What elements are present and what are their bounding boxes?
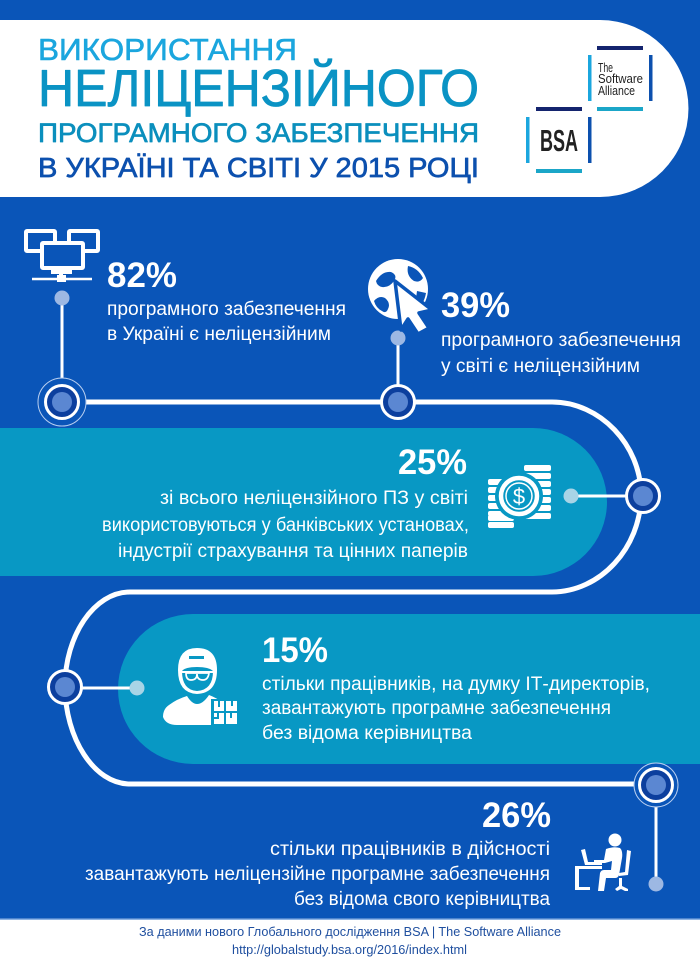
text: 39%: у світі є неліцензійним bbox=[441, 356, 640, 377]
text: 39%: програмного забезпечення bbox=[441, 330, 681, 351]
text: 15%: стільки працівників, на думку ІТ-директорів, bbox=[262, 674, 650, 695]
logo: BSA The Software Alliance: BSA bbox=[540, 123, 578, 158]
node: 82% bbox=[38, 378, 86, 426]
node: 26% bbox=[634, 763, 678, 807]
text: 25%: використовуються у банківських установах, bbox=[102, 515, 469, 536]
text: 82%: в Україні є неліцензійним bbox=[107, 324, 331, 345]
text: 15%: без відома керівництва bbox=[262, 723, 472, 744]
text: 15%: 15% bbox=[262, 631, 328, 670]
connector: 15% bbox=[65, 680, 144, 696]
panel: header bbox=[0, 20, 688, 197]
node: 15% bbox=[48, 670, 82, 704]
node: 25% bbox=[626, 480, 660, 512]
connector: 82% bbox=[54, 290, 70, 402]
icon: networked computers bbox=[26, 231, 98, 282]
icon: IT worker with glasses bbox=[163, 648, 238, 726]
text: 82% bbox=[107, 256, 346, 345]
connector: 25% bbox=[564, 488, 641, 504]
text: 39% bbox=[441, 286, 681, 377]
band: 25% panel bbox=[0, 428, 607, 576]
icon: globe with cursor bbox=[368, 259, 432, 334]
logo: BSA The Software Alliance: The bbox=[598, 61, 613, 75]
source footer bbox=[139, 925, 561, 957]
icon: coins with dollar: $ bbox=[513, 484, 525, 509]
icon: person at laptop bbox=[575, 834, 631, 891]
title bbox=[38, 32, 479, 183]
timeline path bbox=[62, 402, 656, 784]
icon: coins with dollar bbox=[488, 465, 551, 528]
title: НЕЛІЦЕНЗІЙНОГО bbox=[38, 59, 479, 118]
text: 26%: завантажують неліцензійне програмне забезпечення bbox=[85, 864, 550, 885]
node: 39% bbox=[382, 386, 414, 418]
text: 39%: 39% bbox=[441, 286, 510, 325]
text: 25%: зі всього неліцензійного ПЗ у світі bbox=[160, 488, 468, 509]
logo: BSA The Software Alliance: Software bbox=[598, 72, 643, 86]
text: 15%: завантажують програмне забезпечення bbox=[262, 698, 611, 719]
text: 82%: програмного забезпечення bbox=[107, 299, 346, 320]
connector: 26% bbox=[648, 785, 664, 892]
text: 26%: без відома свого керівництва bbox=[294, 889, 550, 910]
title: В УКРАЇНІ ТА СВІТІ У 2015 РОЦІ bbox=[38, 152, 479, 183]
text: 25%: індустрії страхування та цінних паперів bbox=[118, 541, 468, 562]
connector: 39% bbox=[390, 330, 406, 402]
text: 25% bbox=[102, 443, 469, 562]
title: ПРОГРАМНОГО ЗАБЕЗПЕЧЕННЯ bbox=[38, 118, 479, 148]
source footer: За даними нового Глобального дослідження BSA | The Software Alliance bbox=[139, 925, 561, 939]
logo: BSA The Software Alliance: Alliance bbox=[598, 84, 635, 98]
title: ВИКОРИСТАННЯ bbox=[38, 32, 297, 67]
text: 25%: 25% bbox=[398, 443, 467, 482]
logo: BSA The Software Alliance bbox=[526, 46, 652, 173]
band: 15% panel bbox=[118, 614, 700, 764]
source footer: http://globalstudy.bsa.org/2016/index.html bbox=[232, 943, 467, 957]
text: 26% bbox=[85, 796, 551, 910]
text: 15% bbox=[262, 631, 650, 744]
text: 26%: стільки працівників в дійсності bbox=[270, 839, 550, 860]
text: 82%: 82% bbox=[107, 256, 177, 295]
text: 26%: 26% bbox=[482, 796, 551, 835]
